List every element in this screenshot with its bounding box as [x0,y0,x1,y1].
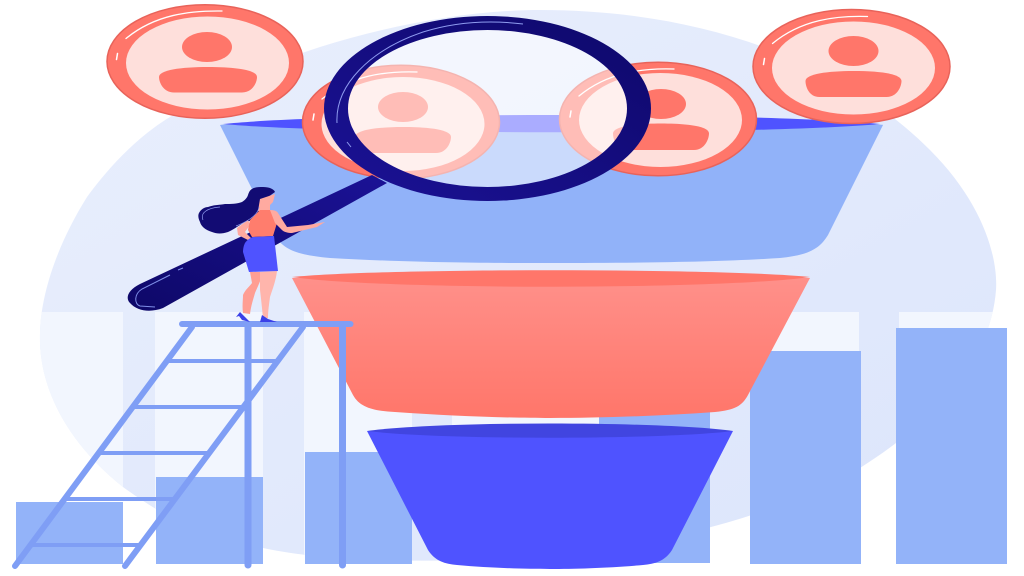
bar chart [16,328,1007,564]
funnel middle opening [292,270,810,287]
funnel: middle red [292,270,810,418]
funnel bottom opening [367,424,733,438]
left arm [237,220,251,240]
left leg [243,272,263,314]
pale background columns [40,312,1007,572]
right leg [260,271,277,318]
ring [324,16,651,201]
skirt [243,236,278,272]
funnel: top blue [220,115,883,263]
person badge: top left [107,5,303,118]
shoes [236,312,277,322]
person badge: right under lens [560,62,756,176]
face [258,194,275,211]
handle [128,175,387,311]
right arm [270,210,325,233]
woman standing on the platform [198,187,325,322]
hair highlight [202,207,259,226]
top [248,210,277,237]
hair [198,187,275,234]
person badge: left under lens [302,65,500,179]
funnel top opening [223,115,880,132]
person badge: top right [753,10,950,124]
funnel: bottom indigo [367,424,733,569]
ladder platform [15,324,350,566]
lens [348,30,628,188]
magnifying glass [128,16,651,311]
